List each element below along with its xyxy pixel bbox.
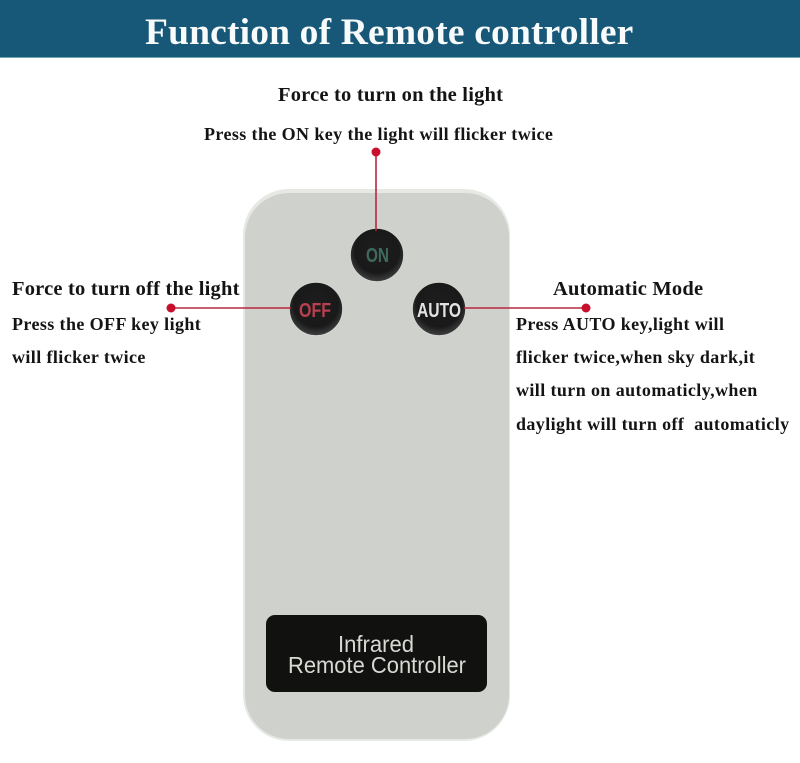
- remote body: [243, 189, 510, 741]
- title: Function of Remote controller: [145, 12, 634, 53]
- right description: Press AUTO key,light will flicker twice,when sky dark,it will turn on automaticly,when daylight will turn off automaticly: [516, 314, 790, 434]
- label plate: Infrared: [338, 631, 414, 657]
- right leader line: [464, 304, 590, 312]
- left heading: Force to turn off the light: [12, 278, 240, 300]
- label plate: Remote Controller: [288, 652, 466, 678]
- right heading: Automatic Mode: [553, 278, 703, 300]
- OFF button: OFF: [299, 300, 331, 322]
- AUTO button: AUTO: [417, 300, 461, 322]
- left leader line: [166, 304, 291, 312]
- AUTO button: [412, 282, 466, 336]
- top leader line: [372, 148, 380, 231]
- label plate: [266, 615, 487, 692]
- OFF button: [290, 282, 342, 336]
- ON button: ON: [366, 245, 389, 267]
- header banner: [0, 0, 800, 58]
- top heading: Force to turn on the light: [278, 84, 503, 106]
- left description: Press the OFF key light will flicker twice: [12, 314, 201, 367]
- top description: Press the ON key the light will flicker twice: [204, 124, 553, 144]
- ON button: [350, 228, 404, 282]
